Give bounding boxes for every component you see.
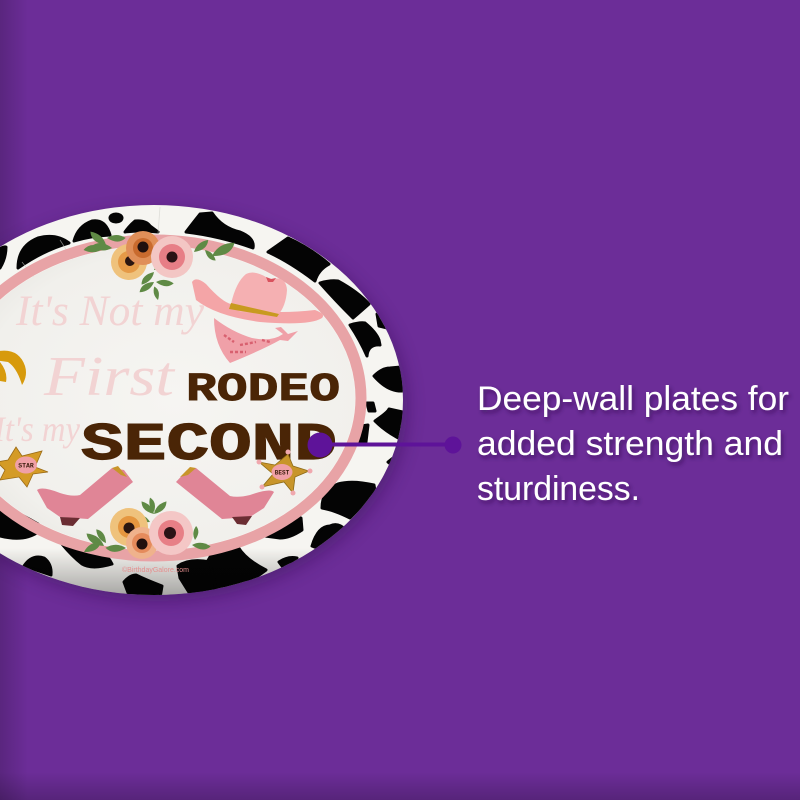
rim ridges: [22, 207, 160, 300]
callout text: [477, 380, 789, 508]
icon: sheriff star right: BEST: [275, 470, 290, 476]
icon: bandana: [214, 318, 298, 363]
plate drop shadow: [0, 211, 407, 601]
script text: It's Not my First: It's Not my: [15, 288, 205, 335]
icon: bottom flowers: [82, 498, 211, 559]
icon: horseshoe: [0, 351, 26, 385]
heading: SECOND: SECOND: [81, 415, 337, 475]
plate center: [0, 246, 355, 550]
connector start dot: [308, 432, 332, 458]
callout text: Deep-wall plates for: [477, 380, 789, 418]
script text: It's Not my First: First: [43, 346, 176, 408]
callout text: added strength and: [477, 425, 783, 463]
connector line: [320, 442, 453, 446]
icon: sheriff star right: [256, 450, 312, 496]
plate: [0, 205, 403, 600]
plate bottom edge shade: [0, 205, 403, 595]
watermark: ©BirthdayGalore.com: [122, 565, 189, 574]
pink ring: [0, 240, 361, 556]
icon: sheriff star left: STAR: [18, 462, 34, 470]
heading: RODEO: RODEO: [186, 368, 340, 413]
icon: top flowers: [83, 231, 237, 300]
icon: cowboy hat: [192, 273, 323, 323]
cow print spots: [0, 213, 403, 600]
callout text: sturdiness.: [477, 470, 640, 508]
icon: sheriff star left: [0, 447, 48, 487]
connector end dot: [444, 436, 462, 454]
script text: It's Not my First: [0, 288, 205, 449]
icon: right boot: [176, 467, 274, 525]
callout: connector: [308, 432, 462, 458]
plate rim: [0, 205, 403, 595]
icon: left boot: [37, 466, 133, 526]
